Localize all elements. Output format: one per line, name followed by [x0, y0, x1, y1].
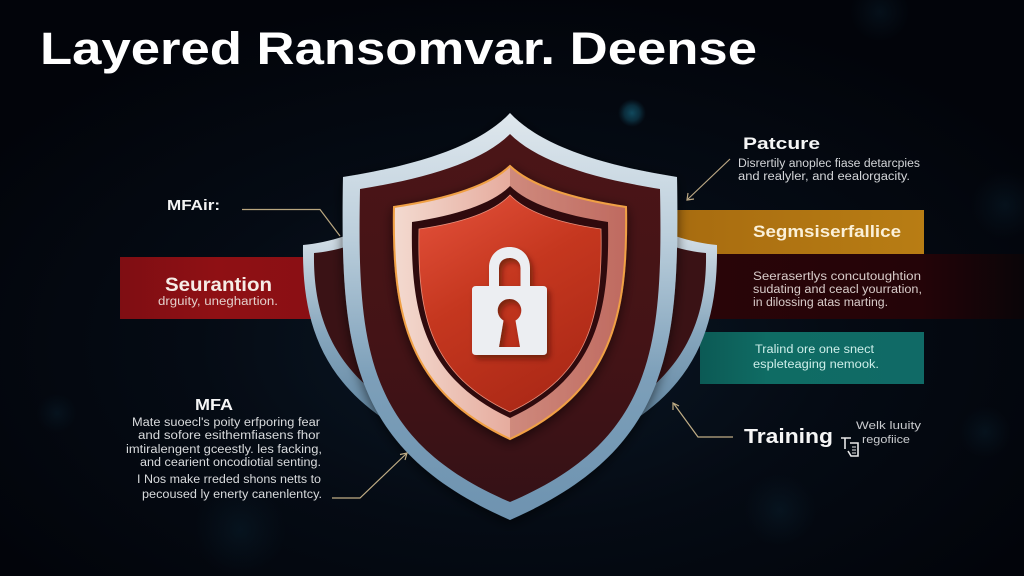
main shield: [343, 113, 677, 520]
text block: MFA: pecoused ly enerty canenlentcy.: [142, 489, 322, 501]
banner text: Seurantion: drguity, uneghartion.: [158, 296, 278, 308]
text block: MFA: MFA: [195, 397, 233, 414]
banner: teal right bar: [700, 332, 924, 384]
title: Layered Ransomvar. Deense: [40, 23, 757, 74]
text block: Patcure: Patcure: [743, 134, 820, 153]
banner text: teal training note: espleteaging nemook.: [753, 359, 879, 371]
text block: Training note: regofiice: [862, 434, 910, 446]
text block: Training note: [856, 420, 922, 446]
text block: MFA: Mate suoecl's poity erfporing fear: [132, 417, 320, 429]
text block: Patcure: Disrertily anoplec fiase detarcpies: [738, 158, 920, 170]
banner text: teal training note: [753, 344, 879, 371]
icon: training cursor: [841, 438, 858, 456]
shield inner pink frame: [394, 166, 626, 439]
shield maroon body: [360, 134, 660, 502]
text block: MFA: [126, 397, 322, 501]
callout: MFAir: MFAir:: [167, 198, 220, 214]
text block: Patcure: and realyler, and eealorgacity.: [738, 171, 910, 183]
banner: gold right bar: [675, 210, 924, 254]
banner text: Seurantion: Seurantion: [165, 275, 272, 296]
shield outer silver frame: [343, 113, 677, 520]
text block: MFA: and sofore esithemfiasens fhor: [138, 430, 320, 442]
text block: segmentation detail: in dilossing atas marting.: [753, 297, 888, 309]
back shield wings: [303, 236, 717, 432]
text block: MFA: imtiralengent gceestly. les facking,: [126, 444, 322, 456]
text block: MFA: I Nos make rreded shons netts to: [137, 474, 321, 486]
callout: MFAir: [167, 198, 340, 236]
text block: Patcure: [738, 134, 920, 183]
icon: padlock: [472, 247, 547, 355]
shield dark inner band: [412, 186, 608, 418]
text block: Training note: Welk luuity: [856, 420, 922, 432]
shield red core: [419, 195, 601, 412]
text block: segmentation detail: [753, 271, 922, 309]
text block: segmentation detail: sudating and ceacl yourration,: [753, 284, 922, 296]
arrow: MFA to shield: [332, 453, 407, 498]
banner text: teal training note: Tralind ore one snect: [755, 344, 875, 356]
banner: red left bar: [120, 257, 315, 319]
text block: MFA: and cearient oncodiotial senting.: [140, 457, 321, 469]
banner: dark maroon right bar: [680, 254, 1024, 319]
banner text: Segmsiserfallice: Segmsiserfallice: [753, 223, 901, 241]
leader line: MFAir: [242, 210, 340, 236]
arrow: Patcure to shield: [687, 159, 730, 200]
text block: segmentation detail: Seerasertlys concutoughtion: [753, 271, 921, 283]
heading: Training: Training: [744, 426, 833, 448]
arrow: Training to shield: [673, 403, 733, 437]
banner text: Seurantion: [158, 275, 278, 308]
